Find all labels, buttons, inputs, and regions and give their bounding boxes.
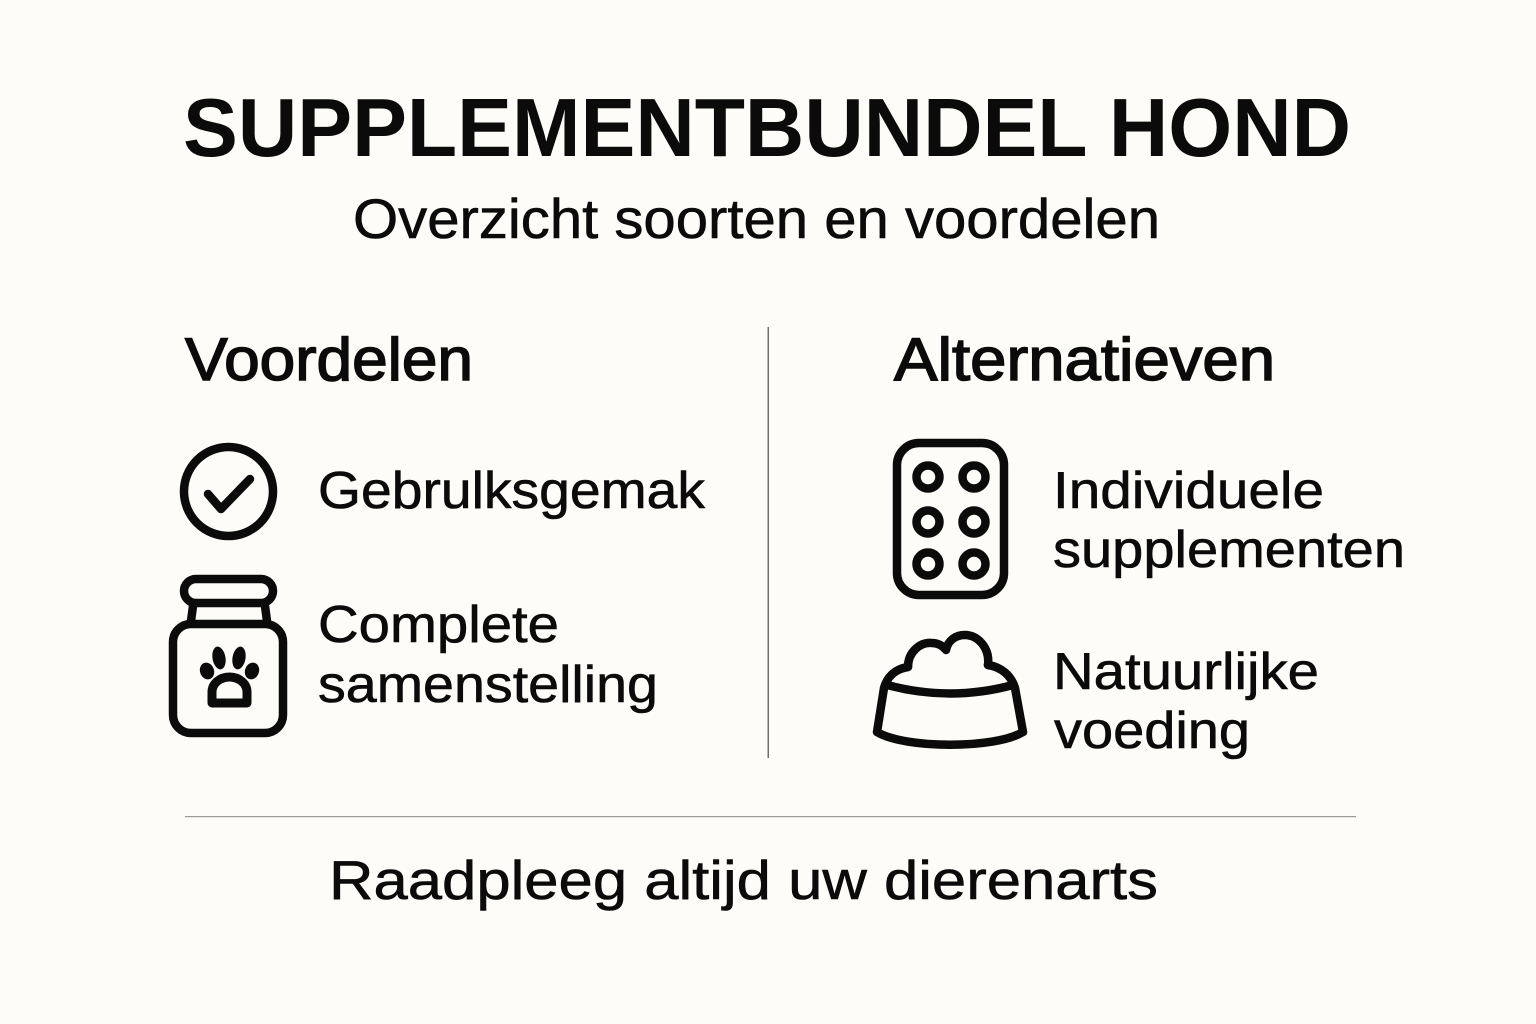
subtitle: Overzicht soorten en voordelen bbox=[353, 187, 1160, 250]
icon: check circle bbox=[184, 447, 273, 536]
label: natuurlijke voeding bbox=[1053, 643, 1319, 760]
center divider bbox=[768, 327, 769, 758]
icon: food bowl bbox=[877, 635, 1023, 745]
icon: blister pack bbox=[897, 443, 1004, 595]
label: gebruiksgemak: Gebrulksgemak bbox=[318, 462, 706, 520]
panel: alternatieven bbox=[877, 326, 1405, 760]
heading: alternatieven: Alternatieven bbox=[894, 326, 1275, 393]
icon: supplement jar with paw bbox=[173, 579, 283, 733]
label: complete samenstelling bbox=[318, 596, 658, 714]
label: individuele supplementen bbox=[1053, 462, 1405, 579]
label: individuele supplementen: Individuele bbox=[1053, 462, 1324, 520]
label: individuele supplementen: supplementen bbox=[1053, 521, 1405, 579]
footer note: Raadpleeg altijd uw dierenarts bbox=[329, 849, 1158, 911]
footer divider bbox=[185, 816, 1356, 817]
label: complete samenstelling: Complete bbox=[318, 596, 559, 654]
heading: voordelen: Voordelen bbox=[185, 326, 473, 393]
label: complete samenstelling: samenstelling bbox=[318, 656, 658, 714]
title: SUPPLEMENTBUNDEL HOND bbox=[183, 81, 1351, 174]
panel: voordelen bbox=[173, 326, 706, 733]
label: natuurlijke voeding: Natuurlijke bbox=[1053, 643, 1319, 701]
label: natuurlijke voeding: voeding bbox=[1054, 702, 1250, 760]
